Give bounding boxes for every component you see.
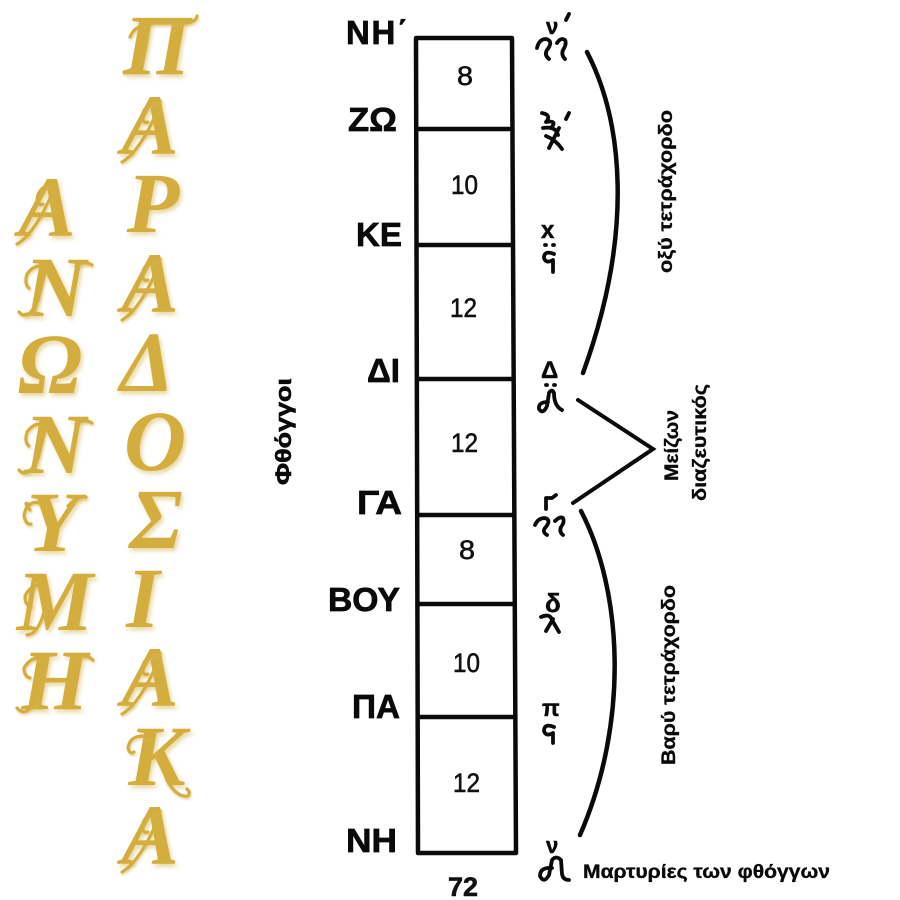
title column: ΠΑΡΑΔΟΣΙΑΚΑ: Ρ	[126, 155, 181, 251]
martyria signs	[535, 14, 569, 880]
note names: ΝΗ	[346, 822, 397, 859]
note names: ΓΑ	[357, 484, 402, 521]
martyria: Zo	[542, 113, 569, 149]
label: major disjunctive line 1: Μείζων	[662, 410, 683, 481]
title column: ΑΝΩΝΥΜΗ	[13, 159, 96, 728]
scale column with intervals	[416, 38, 516, 853]
title column: ΠΑΡΑΔΟΣΙΑΚΑ: Δ	[117, 314, 174, 410]
martyria: low Ni	[540, 833, 569, 880]
note names: ΔΙ	[367, 352, 400, 389]
note names: ΝΗ΄	[346, 14, 408, 51]
note names: ΚΕ	[356, 216, 402, 253]
interval values: 8	[459, 535, 475, 565]
martyria: Ke	[541, 217, 555, 272]
title column: ΠΑΡΑΔΟΣΙΑΚΑ: Α	[116, 787, 179, 883]
interval values	[450, 61, 480, 798]
title column: ΠΑΡΑΔΟΣΙΑΚΑ: Α	[116, 235, 179, 331]
title column: ΠΑΡΑΔΟΣΙΑΚΑ: Α	[116, 629, 179, 725]
arc: upper tetrachord	[583, 52, 618, 373]
interval values: 12	[453, 768, 480, 798]
title column: ΠΑΡΑΔΟΣΙΑΚΑ: Κ	[127, 708, 191, 804]
title column: ΑΝΩΝΥΜΗ: Υ	[27, 474, 87, 570]
disjunctive tone bracket	[573, 400, 653, 503]
vertical axis label: Φθόγγοι	[271, 378, 296, 485]
arc: lower tetrachord	[580, 511, 615, 835]
martyria: Vou	[541, 588, 561, 632]
interval values: 8	[457, 61, 473, 91]
martyria: Di: Δ	[541, 357, 558, 384]
note names: ΒΟΥ	[328, 581, 400, 618]
title column: ΑΝΩΝΥΜΗ: Η	[21, 632, 92, 728]
interval values: 12	[450, 293, 477, 323]
label: upper tetrachord: οξύ τετράχορδο	[656, 110, 677, 273]
label: major disjunctive line 2: διαζευτικός	[690, 384, 711, 501]
interval values: 10	[451, 170, 478, 200]
martyria: Di	[539, 357, 562, 411]
note names	[328, 14, 408, 859]
martyria: high Ni	[537, 14, 569, 59]
interval values: 10	[453, 648, 480, 678]
martyria: high Ni: ν	[546, 14, 558, 39]
note names: ΖΩ	[348, 101, 397, 138]
martyria: Pa: π	[542, 695, 560, 721]
label: lower tetrachord: Βαρύ τετράχορδο	[659, 585, 680, 765]
title column: ΑΝΩΝΥΜΗ: Μ	[15, 553, 96, 649]
interval values: 12	[451, 428, 478, 458]
martyria: Ke: x	[541, 217, 555, 244]
martyria: Vou: δ	[545, 588, 561, 618]
title column: ΠΑΡΑΔΟΣΙΑΚΑ: Ι	[125, 550, 162, 646]
title column: ΑΝΩΝΥΜΗ: Α	[13, 159, 76, 255]
title flourishes	[17, 16, 197, 872]
title column: ΑΝΩΝΥΜΗ: Ν	[23, 396, 89, 492]
title column: ΑΝΩΝΥΜΗ: Ω	[18, 316, 82, 412]
title column: ΠΑΡΑΔΟΣΙΑΚΑ	[116, 0, 194, 883]
title column: ΠΑΡΑΔΟΣΙΑΚΑ: Α	[116, 77, 179, 173]
martyria: Pa	[542, 695, 560, 743]
title column: ΠΑΡΑΔΟΣΙΑΚΑ: Ο	[124, 393, 186, 489]
title column: ΑΝΩΝΥΜΗ: Ν	[23, 239, 89, 335]
martyria: Ga	[535, 495, 564, 535]
martyria: low Ni: ν	[546, 833, 558, 858]
note names: ΠΑ	[352, 688, 400, 725]
label: martyria caption: Μαρτυρίες των φθόγγων	[583, 862, 830, 883]
title column: ΠΑΡΑΔΟΣΙΑΚΑ: Σ	[127, 471, 183, 567]
